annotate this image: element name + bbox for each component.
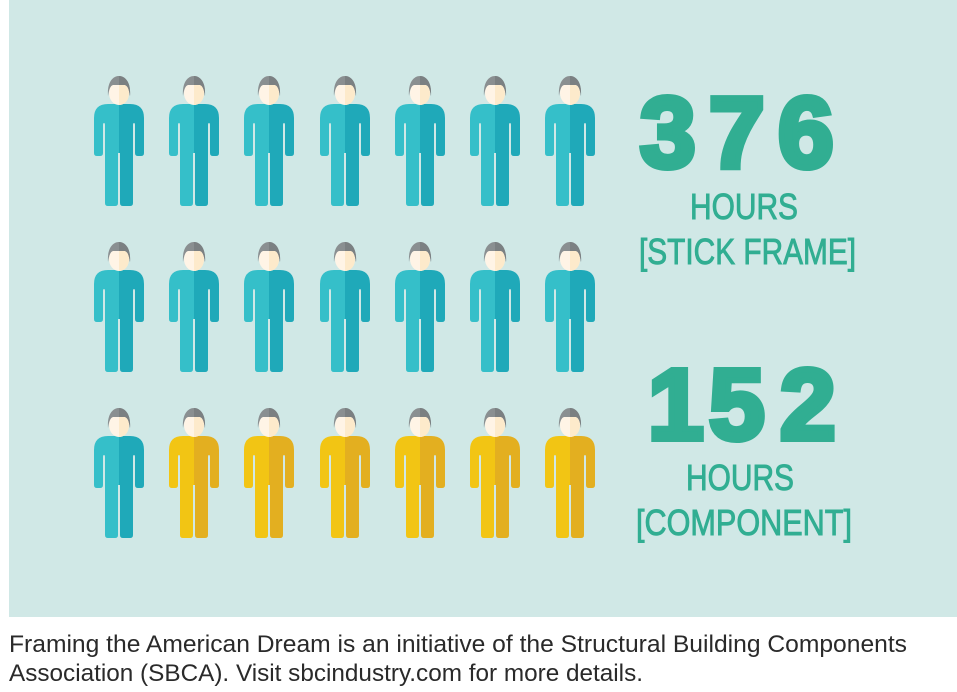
stat: 152 hours component: HOURS [686,457,794,498]
pictogram: row 2, stick frame workers [94,242,595,372]
caption [9,631,907,687]
stat: 152 hours component: 152 [648,349,836,461]
stat: 376 hours stick frame: 376 [640,77,834,189]
stat: 376 hours stick frame [639,77,856,272]
pictogram: row 1, stick frame workers [94,76,595,206]
stat: 152 hours component: [COMPONENT] [636,502,852,543]
caption: Framing the American Dream is an initiative of the Structural Building Components [9,631,907,658]
stat: 152 hours component [636,349,852,543]
caption: Association (SBCA). Visit sbcindustry.com for more details. [9,660,643,687]
stat: 376 hours stick frame: [STICK FRAME] [639,231,856,272]
pictogram: row 3, one stick frame worker and six component workers [94,408,595,538]
stat: 376 hours stick frame: HOURS [690,186,798,227]
